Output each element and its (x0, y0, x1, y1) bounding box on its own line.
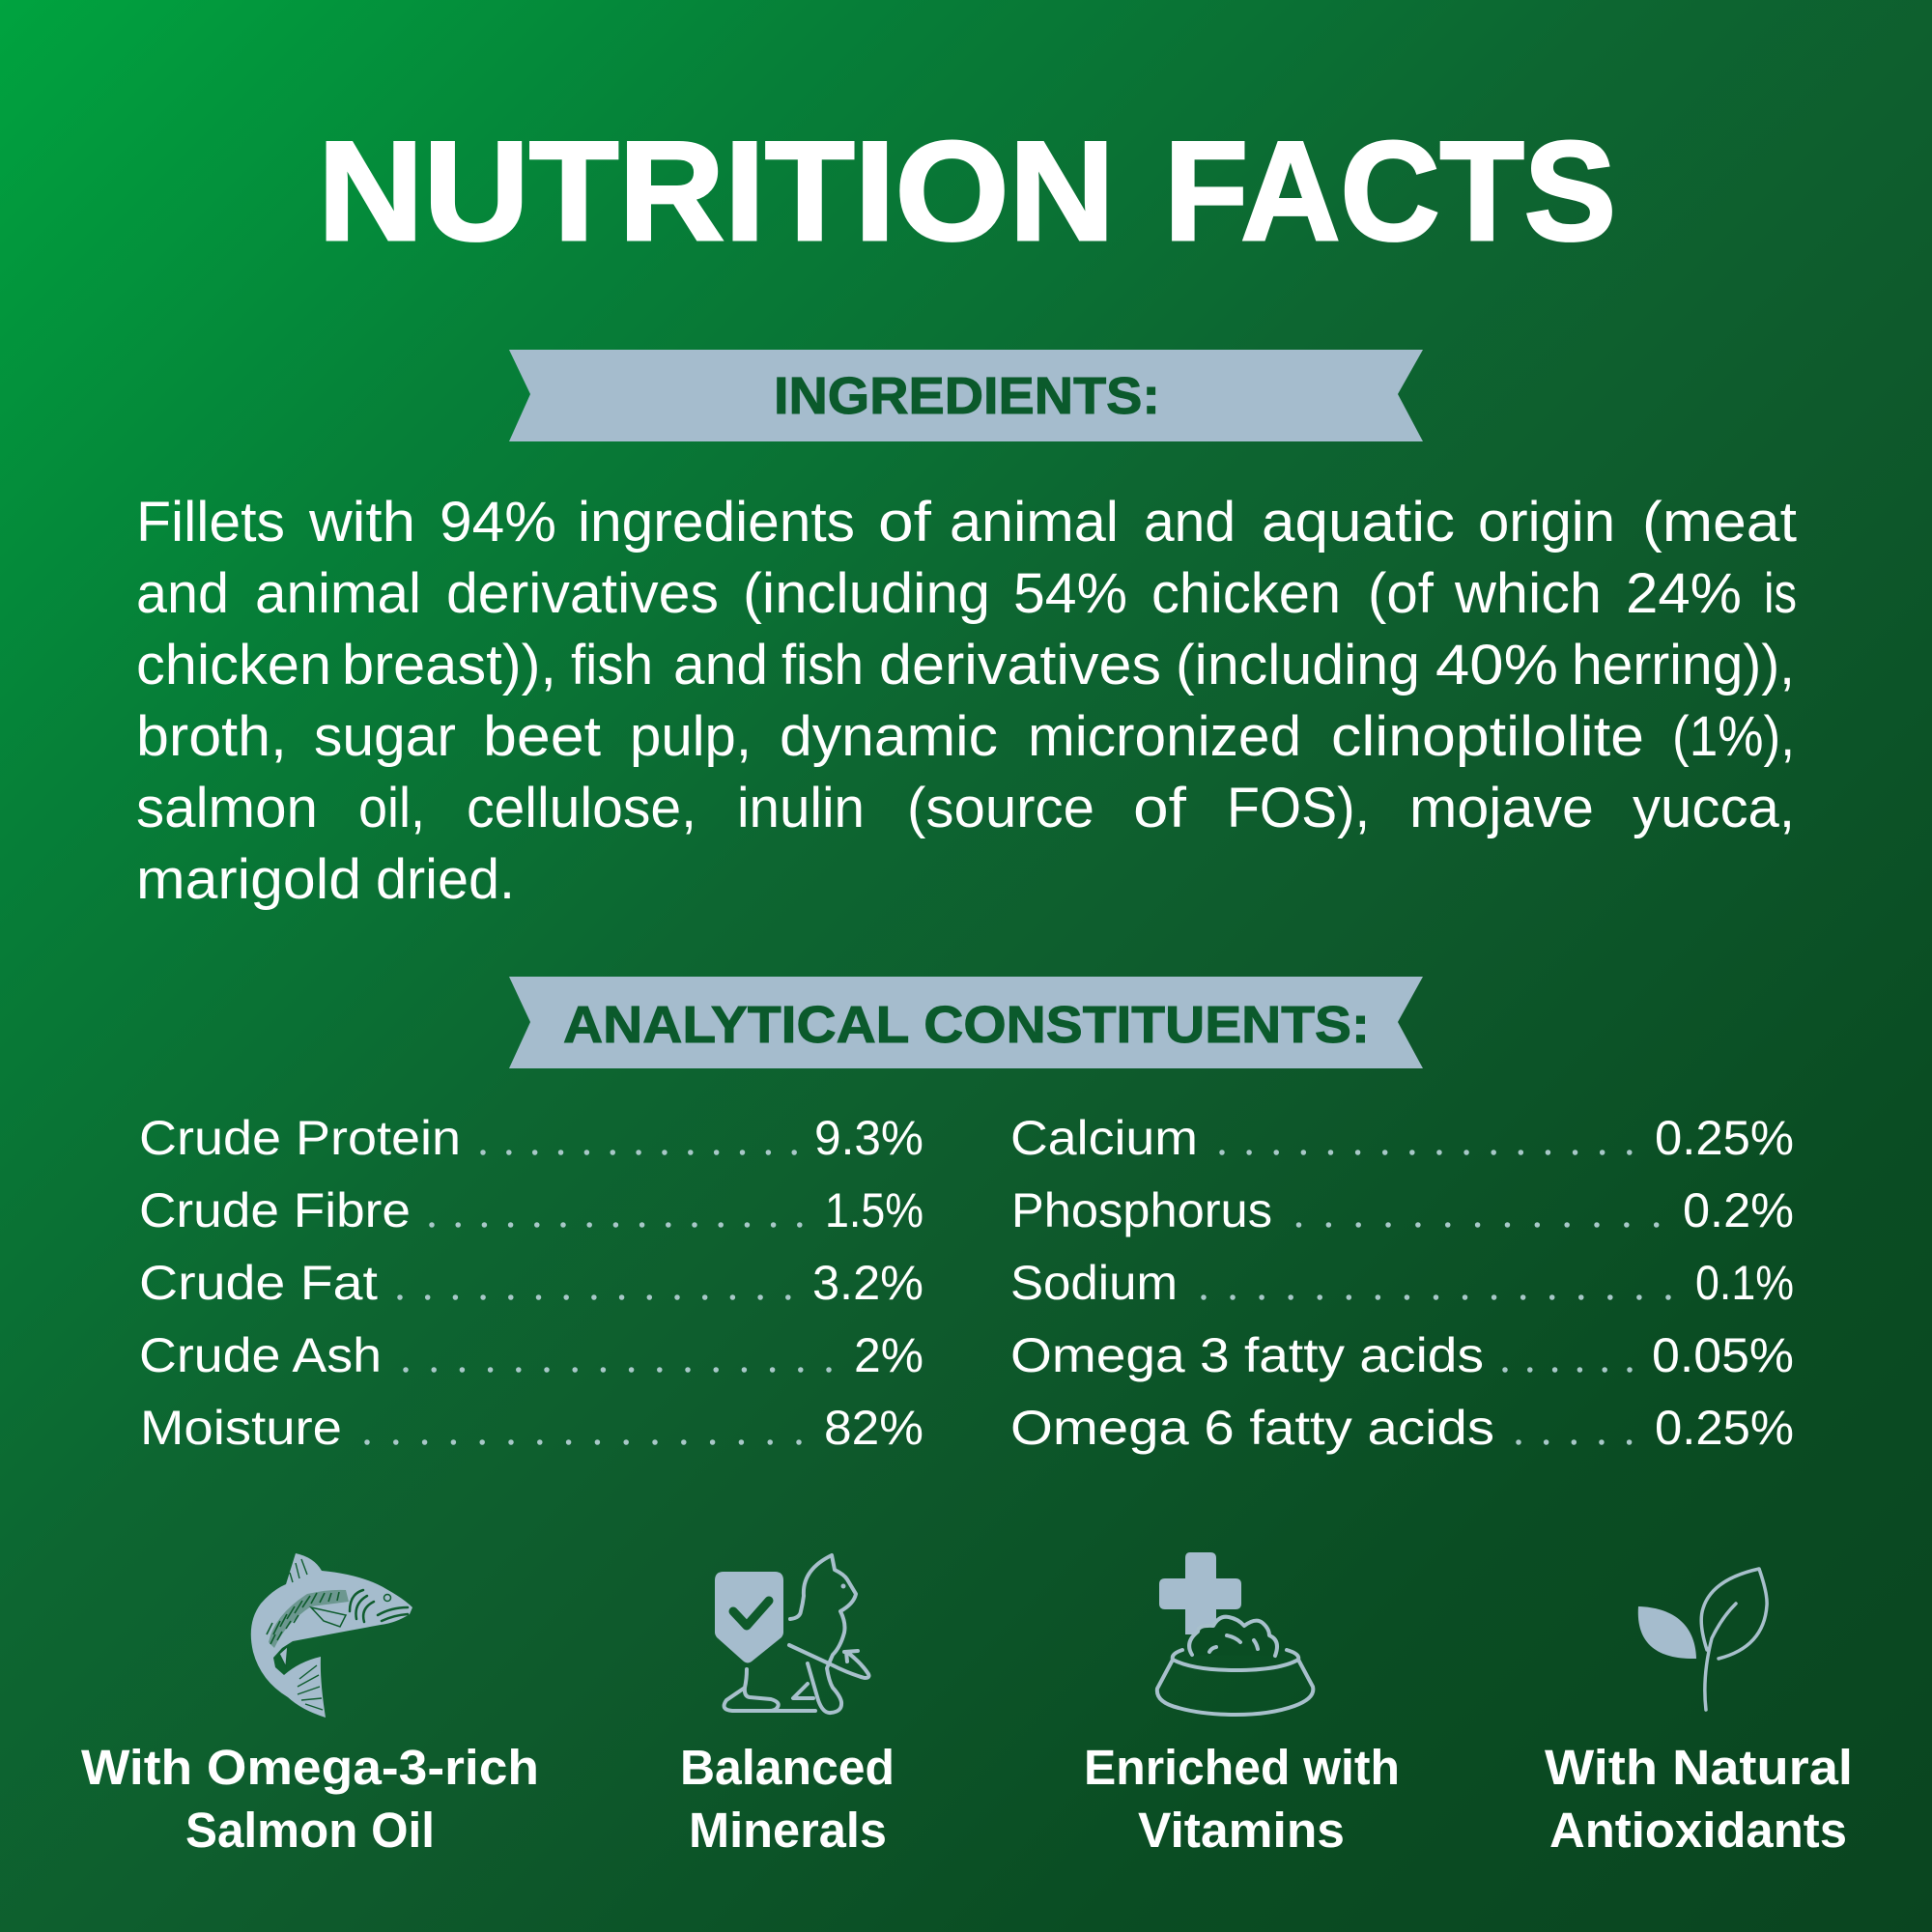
ingredients text block: of (1133, 777, 1187, 839)
ingredients text block: and (1144, 491, 1236, 554)
ingredients text block: chicken (136, 634, 331, 696)
ingredients text block (136, 491, 1797, 911)
constituents table: left column: 82% (824, 1401, 923, 1455)
constituents table: left column: 9.3% (814, 1111, 923, 1165)
ingredients text block: is (1764, 562, 1797, 625)
ingredients text block: derivatives (879, 634, 1161, 696)
ingredients text block: fish (781, 634, 864, 696)
ingredients text block: animal (950, 491, 1119, 554)
ingredients text block: 24% (1626, 562, 1742, 625)
constituents table: right column: Sodium (1010, 1256, 1178, 1310)
ingredients text block: animal (255, 562, 421, 625)
title (318, 112, 1616, 270)
ingredients text block: Fillets (136, 491, 285, 554)
ingredients text block: FOS), (1227, 777, 1370, 839)
banner: ingredients (509, 350, 1423, 441)
ingredients text block: 40% (1435, 634, 1558, 696)
label: natural antioxidants: Antioxidants (1549, 1803, 1847, 1858)
ingredients text block: fish (571, 634, 653, 696)
ingredients text block: derivatives (446, 562, 719, 625)
ingredients text block: (including (1176, 634, 1420, 696)
ingredients text block: (source (907, 777, 1094, 839)
ingredients text block: with (308, 491, 415, 554)
constituents table: right column: Phosphorus (1011, 1183, 1272, 1237)
label: balanced minerals (680, 1740, 895, 1858)
constituents table: left column: Crude Ash (139, 1328, 382, 1382)
ingredients text block: (1%), (1672, 705, 1795, 768)
ingredients text block: micronized (1028, 705, 1301, 768)
constituents table: left column: 3.2% (812, 1256, 923, 1310)
ingredients text block: herring)), (1572, 634, 1795, 696)
constituents table: right column: 0.1% (1695, 1256, 1794, 1310)
icon: salmon (251, 1553, 412, 1718)
ingredients text block: breast)), (342, 634, 556, 696)
constituents table: right column: 0.25% (1655, 1401, 1794, 1455)
label: salmon oil: With Omega-3-rich (81, 1740, 539, 1795)
constituents table: right column: 0.05% (1652, 1328, 1794, 1382)
constituents table: left column (139, 1111, 923, 1455)
title: FACTS (1164, 112, 1616, 270)
ingredients text block: salmon (136, 777, 318, 839)
ingredients text block: cellulose, (467, 777, 696, 839)
ingredients text block: aquatic (1262, 491, 1455, 554)
ingredients text block: chicken (1151, 562, 1341, 625)
ingredients text block: mojave (1409, 777, 1594, 839)
label: balanced minerals: Balanced (680, 1740, 895, 1795)
ingredients text block: broth, (136, 705, 287, 768)
constituents table: left column: Crude Fat (139, 1256, 378, 1310)
label: balanced minerals: Minerals (689, 1803, 887, 1858)
constituents table: right column: Calcium (1010, 1111, 1198, 1165)
ingredients text block: clinoptilolite (1331, 705, 1644, 768)
ingredients text block: 54% (1013, 562, 1127, 625)
label: enriched with vitamins: Enriched with (1084, 1740, 1400, 1795)
ingredients text block: dried. (376, 848, 515, 911)
ingredients text block: 94% (440, 491, 556, 554)
constituents table: left column: Moisture (140, 1401, 342, 1455)
ingredients text block: oil, (358, 777, 425, 839)
banner: ingredients: INGREDIENTS: (774, 367, 1160, 425)
ingredients text block: origin (1478, 491, 1615, 554)
ingredients text block: sugar (314, 705, 456, 768)
banner: analytical constituents: ANALYTICAL CONSTITUENTS: (563, 996, 1370, 1054)
constituents table: left column: 2% (854, 1328, 923, 1382)
constituents table: right column: Omega 6 fatty acids (1010, 1401, 1494, 1455)
title: NUTRITION (318, 112, 1115, 270)
label: natural antioxidants (1545, 1740, 1853, 1858)
label: salmon oil: Salmon Oil (185, 1803, 435, 1858)
icon: leaves (1638, 1569, 1767, 1710)
ingredients text block: ingredients (578, 491, 855, 554)
ingredients text block: (including (743, 562, 990, 625)
ingredients text block: and (673, 634, 768, 696)
ingredients text block: pulp, (630, 705, 752, 768)
label: natural antioxidants: With Natural (1545, 1740, 1853, 1795)
label: enriched with vitamins: Vitamins (1138, 1803, 1345, 1858)
constituents table: right column (1010, 1111, 1794, 1455)
ingredients text block: marigold (136, 848, 361, 911)
label: salmon oil (81, 1740, 539, 1858)
ingredients text block: dynamic (780, 705, 998, 768)
constituents table: left column: Crude Protein (139, 1111, 461, 1165)
ingredients text block: which (1454, 562, 1602, 625)
ingredients text block: and (136, 562, 229, 625)
constituents table: left column: Crude Fibre (139, 1183, 411, 1237)
ingredients text block: of (878, 491, 932, 554)
constituents table: right column: 0.25% (1655, 1111, 1794, 1165)
label: enriched with vitamins (1084, 1740, 1400, 1858)
ingredients text block: (of (1368, 562, 1435, 625)
banner: analytical constituents (509, 977, 1423, 1068)
icon: shield and cat (715, 1555, 869, 1713)
constituents table: right column: 0.2% (1683, 1183, 1794, 1237)
icon: cross and food bowl (1157, 1552, 1313, 1715)
ingredients text block: beet (483, 705, 601, 768)
ingredients text block: inulin (737, 777, 865, 839)
ingredients text block: yucca, (1633, 777, 1795, 839)
ingredients text block: (meat (1642, 491, 1797, 554)
constituents table: left column: 1.5% (825, 1183, 923, 1237)
constituents table: right column: Omega 3 fatty acids (1010, 1328, 1484, 1382)
